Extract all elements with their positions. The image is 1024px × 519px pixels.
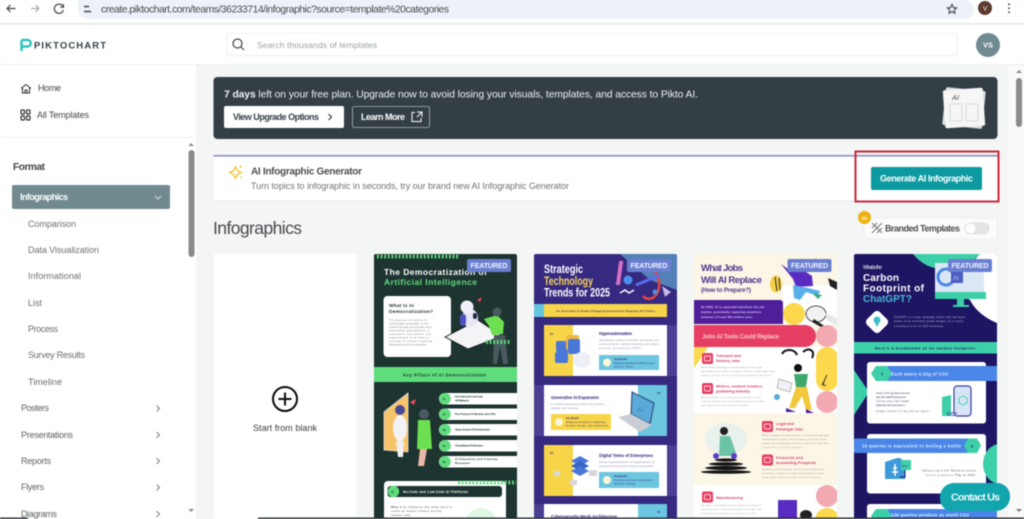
browser toolbar	[0, 0, 1024, 24]
job: writers: publishing industry	[716, 390, 751, 394]
trend 2: generative AI: 02	[657, 391, 661, 395]
job: finance: automation, number-crunching, bookkeeping and data	[762, 472, 825, 475]
fact 2: boiling: 2	[971, 444, 974, 448]
intro text: ChatGPT is a large language model that has been	[894, 316, 966, 319]
icon: browser menu	[1008, 4, 1010, 12]
featured badge: FEATURED	[952, 263, 988, 270]
job: manufacturing: repetitive tasks, factory work roles in changes and	[701, 508, 762, 511]
category items	[21, 403, 74, 519]
illustration: monitor with AI	[935, 263, 986, 307]
featured badge: FEATURED	[470, 263, 508, 270]
fact 2: boiling: 16 queries is equivalent to boiling a bottle	[862, 444, 962, 448]
decoration: teal half circle	[983, 444, 1017, 484]
trend 1: hyperautomation: Key Benefit:	[614, 358, 628, 361]
fact 1: per query: CO2 per query than Google	[876, 400, 910, 403]
decoration: flying person	[770, 258, 837, 300]
band: carbon breakdown	[854, 342, 997, 354]
sub-menu items: Survey Results	[28, 350, 86, 360]
featured badge	[467, 259, 511, 272]
pillars list: No-Code and Low-Code	[455, 394, 483, 398]
pillars list: AI Platforms	[455, 398, 469, 402]
job: legal: analysis, the drafting work could be at risk and the legal field	[762, 442, 829, 445]
intro box: organizations of all sizes to	[389, 336, 430, 340]
card: carbon footprint of ChatGPT	[854, 254, 1017, 519]
card title	[384, 267, 487, 287]
icon: star	[947, 4, 957, 13]
AI generator panel	[214, 152, 998, 202]
job: finance: Handling accounting jobs can be done by AI-based	[762, 468, 825, 471]
intro box	[384, 296, 451, 357]
job: transport: replaces drivers that in turn may face potential job losses.	[701, 374, 772, 377]
trend 1: hyperautomation: defined tasks.	[614, 366, 634, 368]
decoration: yellow corner	[694, 347, 708, 368]
fact 2: boiling: kettle produces 70g of CO2.	[926, 474, 976, 477]
job: legal: Models probably touch by checking or reviewing through legal	[762, 434, 830, 437]
sub-menu items: Comparison	[28, 219, 76, 229]
decoration: yellow pill	[816, 347, 838, 413]
button: generate AI infographic: Generate AI Infographic	[880, 174, 973, 184]
button: contact us	[940, 483, 1010, 511]
button: view upgrade options	[224, 106, 344, 128]
nav: home	[21, 83, 61, 93]
trend 1: hyperautomation: 01	[550, 332, 554, 336]
trend 1: hyperautomation: Hyperautomation	[599, 331, 632, 336]
job: legal: could face corporate changes.	[762, 446, 803, 449]
nav: all templates: All Templates	[37, 110, 90, 120]
pillars list: 03	[442, 428, 446, 432]
card title	[863, 265, 925, 305]
sidebar	[0, 65, 196, 519]
job: legal: Paralegal Jobs	[776, 428, 803, 432]
banner message: 7 days left on your free plan. Upgrade now to avoid losing your visuals, templates, and access to Pikto AI.	[224, 90, 698, 100]
active item: infographics	[12, 185, 170, 209]
url text: create.piktochart.com/teams/36233714/infographic?source=template%20categories	[101, 4, 449, 16]
trend 2: generative AI: product design, and automation.	[566, 424, 609, 428]
icon: magnifier	[233, 39, 244, 50]
job: transport: depending on the number of intelligent vehicles in wide-range usage	[701, 370, 776, 373]
trend 3: digital twins: 03	[550, 451, 554, 455]
job: writers: Writers, content creators,	[716, 384, 763, 388]
intro block	[694, 300, 783, 324]
category items: Presentations	[21, 430, 74, 440]
trend 4: cybersecurity: 04	[657, 510, 661, 514]
job: legal: Legal and	[776, 422, 795, 426]
highlight: red box	[856, 152, 998, 202]
icon: back arrow	[7, 5, 16, 12]
intro box: experts through user-friendly tools,	[389, 326, 432, 329]
app header	[0, 25, 1024, 65]
intro block: between 2.4 and 300 million jobs.	[701, 315, 753, 319]
button: learn more: Learn More	[361, 112, 405, 122]
profile badge	[978, 1, 992, 15]
trend 1: hyperautomation: Automating complex business processes end	[599, 339, 660, 342]
intro box: advanced technical expertise.	[389, 344, 427, 346]
decorative shapes	[617, 254, 677, 299]
fact 1: per query: Using a CO2 calculator and some	[876, 392, 911, 395]
icon: crown badge	[858, 211, 871, 224]
generator title: AI Infographic Generator	[251, 166, 362, 178]
section box: platforms: create AI models without writing	[391, 510, 442, 513]
trend 2: generative AI: Key Benefit:	[566, 417, 580, 420]
icon: forward arrow	[31, 5, 39, 12]
profile badge: V	[983, 6, 988, 12]
band: carbon breakdown: Here's a breakdown of its carbon footprint:	[875, 346, 976, 350]
illustration: person with laptop	[774, 350, 814, 413]
intro text: shown to be extremely power-hungry. As a result,	[894, 320, 964, 323]
fact 1: per query: 1	[881, 371, 884, 376]
featured badge	[948, 259, 992, 272]
job: finance	[762, 454, 825, 479]
trend 1: hyperautomation: Reduces operational effort by up to	[614, 362, 655, 365]
sub-menu items	[28, 219, 99, 387]
band: key pillars: Key Pillars of AI Democratization	[403, 372, 486, 378]
pillars list: 01	[442, 397, 446, 401]
card title: ChatGPT?	[863, 294, 912, 305]
card title: Artificial Intelligence	[384, 277, 477, 287]
decoration: robot head	[806, 306, 837, 331]
user avatar: VS	[983, 40, 993, 50]
featured badge: FEATURED	[791, 263, 828, 270]
card title: The Democratization of	[384, 267, 487, 277]
toggle switch	[965, 223, 989, 234]
featured badge: FEATURED	[630, 263, 668, 270]
branded label: Branded Templates	[885, 224, 960, 234]
illustration: data stack	[554, 456, 597, 485]
button: learn more	[352, 106, 430, 128]
decorative shapes	[913, 254, 997, 323]
address bar	[78, 0, 974, 19]
illustration: laptop: AI	[637, 407, 644, 414]
search placeholder: Search thousands of templates	[257, 40, 377, 50]
heading: format: Format	[13, 162, 46, 173]
pillars list: Pre-Trained AI Models and APIs	[455, 412, 496, 416]
icon: location diamond	[864, 309, 890, 335]
card title: What Jobs	[701, 263, 743, 274]
trend 3: digital twins: simulate and optimize business processes.	[599, 465, 654, 468]
section box: platforms: What It Is: Platforms that allow users to	[391, 506, 453, 509]
window bottom edge	[0, 518, 1024, 519]
sub-menu items: List	[28, 298, 42, 308]
pillars list: 04	[442, 444, 446, 448]
intro box: leverage AI without requiring	[389, 340, 433, 343]
section box: platforms: No-Code and Low-Code AI Platforms	[403, 490, 468, 494]
trend 4: cybersecurity: Cybersecurity Mesh Architecture	[551, 514, 618, 519]
category items: Diagrams	[21, 509, 58, 519]
icon: plus	[273, 387, 297, 411]
category items: Posters	[21, 403, 50, 413]
illustration: kettle: Co2	[902, 464, 908, 468]
icon: reload	[54, 4, 63, 13]
trend 2: generative AI: Generative AI Expansion	[551, 395, 599, 400]
trend 1: hyperautomation	[544, 325, 667, 376]
trend 2: generative AI	[544, 385, 667, 436]
banner: jobs list: Jobs AI Tools Could Replace	[702, 334, 780, 340]
trend 2: generative AI: AI models generating human-like content,	[551, 403, 605, 406]
section heading: infographics: Infographics	[213, 218, 302, 238]
top stripes	[377, 254, 459, 258]
pillars list: 02	[442, 412, 446, 416]
section box: platforms	[384, 481, 516, 519]
pillars list	[439, 393, 529, 468]
illustration: robot and woman	[384, 393, 432, 466]
fact 2: boiling: Taking a cup of boil' Boiling an electric	[922, 470, 977, 472]
card: start from blank	[214, 254, 356, 519]
sub-menu items: Data Visualization	[28, 245, 99, 255]
job: transport: Autonomous technology is already helping in these jobs,	[701, 366, 763, 369]
side stripes	[534, 325, 677, 519]
trend 3: digital twins: Key Benefit:	[614, 475, 628, 478]
card title: Footprint of	[863, 284, 925, 294]
featured badge	[627, 259, 671, 272]
icon: site settings	[84, 6, 91, 12]
job: transport	[701, 353, 776, 377]
job: manufacturing: As robotics and digital factory systems in charge of	[701, 504, 761, 507]
fact 2: boiling	[854, 434, 986, 494]
sidebar scrollbar	[188, 143, 194, 512]
card title: What is the	[863, 265, 882, 271]
logo: PIKTOCHART	[34, 40, 106, 52]
illustration: phone with CO2: CO²	[947, 411, 957, 418]
job: transport: Delivery Jobs	[716, 359, 740, 363]
pillars list: AI Education and Training	[455, 457, 497, 461]
user avatar	[976, 33, 1000, 57]
card title: Will AI Replace	[701, 275, 762, 286]
illustration: figure on podium	[701, 423, 751, 474]
nav: home: Home	[38, 83, 61, 93]
intro box: empowers individuals and	[389, 333, 432, 336]
illustration: robot with tablet	[445, 297, 510, 364]
featured badge	[788, 259, 832, 272]
job: transport: Transport and	[716, 354, 742, 358]
button: view upgrade options: View Upgrade Options	[233, 112, 319, 122]
illustration: servers	[555, 335, 580, 363]
main page scrollbar	[1008, 65, 1024, 519]
pillars list: 05	[442, 460, 446, 464]
intro block: market, potentially replacing anywhere	[701, 310, 761, 314]
job: legal	[762, 421, 830, 449]
icon: tools	[872, 223, 882, 233]
section box: platforms: complex code.	[391, 514, 411, 517]
job: manufacturing: machines working more and long hours now.	[701, 512, 756, 515]
sub-menu items: Informational	[28, 271, 81, 281]
job: legal: representations produce more changes in the sector where	[762, 438, 828, 441]
blank label: Start from blank	[253, 423, 318, 433]
card: democratization of AI	[374, 254, 529, 519]
fact 1: per query	[867, 362, 997, 424]
trend 2: generative AI: designs, and solutions.	[551, 407, 579, 410]
job: finance: Accounting Prospects	[776, 461, 816, 465]
icon: sparkles	[230, 165, 242, 178]
pillars list: Cloud-Based AI Services	[455, 444, 483, 448]
section box: platforms: 01	[391, 490, 395, 494]
trend 3: digital twins: Digital Twins of Enterprises	[599, 453, 654, 458]
intro box: The process of making AI	[389, 319, 427, 322]
band: key pillars	[374, 367, 517, 382]
button: contact us: Contact Us	[951, 492, 1000, 504]
generator subtitle: Turn topics to infographic in seconds, try our brand new AI Infographic Generator	[251, 181, 569, 191]
active item: infographics: Infographics	[20, 192, 68, 202]
pillars list: Resources	[455, 461, 470, 465]
job: finance: entry, while, can be accurate, and run every day.	[762, 476, 821, 479]
job: writers: tools and articles, and creating first drafts.	[701, 404, 749, 407]
intro box: Democratization?	[389, 309, 433, 315]
banner: jobs list	[694, 325, 838, 347]
trend 2: generative AI: Enhances creativity in marketing,	[566, 421, 606, 424]
pillars list: Open-Source AI Frameworks	[455, 428, 490, 432]
decoration: bottom shapes	[778, 485, 839, 519]
intro text	[894, 316, 966, 328]
intro text: it produces a lot of CO2 emissions.	[894, 325, 944, 328]
trend 4: cybersecurity	[544, 504, 667, 519]
job: writers: workflow helping them with keyword research, briefing	[701, 400, 765, 403]
intro box: What Is AI	[389, 303, 415, 309]
trend 3: digital twins: Virtual representations of organizations to	[599, 461, 655, 464]
trend 3: digital twins: Improves decision-making and	[614, 479, 653, 482]
category items: Reports	[21, 456, 52, 466]
upgrade banner	[214, 77, 998, 139]
icon: AI document stack: AI	[951, 93, 959, 102]
card title	[701, 263, 762, 294]
job: manufacturing: Manufacturing	[716, 496, 744, 500]
job: writers	[701, 383, 765, 407]
subtitle band	[534, 304, 667, 317]
fact 1: per query: (apparently, each search query in	[876, 404, 906, 407]
sub-menu items: Process	[28, 324, 58, 334]
decoration: teal triangle	[854, 370, 869, 415]
fact 3: comparison	[867, 504, 997, 519]
card: strategic technology trends	[534, 254, 677, 519]
intro box: frameworks, and platforms. It	[389, 330, 429, 332]
intro box: technologies accessible to non-	[389, 322, 429, 326]
illustration: monitor with AI: AI	[953, 276, 959, 282]
trend 3: digital twins: business strategy.	[614, 482, 636, 486]
icon: AI document stack	[942, 87, 986, 129]
trend 1: hyperautomation: to end using AI, machine learning, and robotic	[599, 343, 660, 346]
subtitle band: An Overview of Game-Changing Innovations Shaping the Future	[556, 309, 655, 313]
job: finance: Financial and	[776, 456, 804, 460]
card: what jobs will AI replace	[694, 254, 839, 519]
card title: Trends for 2025	[544, 288, 610, 300]
job: manufacturing	[701, 492, 762, 515]
search box	[227, 34, 957, 56]
category items: Flyers	[21, 482, 44, 492]
fact 1: per query: basic math, ChatGPT produces more	[876, 396, 907, 399]
fact 1: per query: Each query 4.32g of CO2	[891, 372, 949, 376]
fact 3: comparison: 139 queries produce as much CO2	[891, 512, 970, 518]
job: writers: Many industries use content generation AI to create	[701, 396, 762, 399]
fact 1: per query: Google results in 0.2g CO2 per query.)	[876, 410, 930, 413]
card title: (How to Prepare?)	[701, 288, 751, 294]
trend 1: hyperautomation: process automation (RPA).	[599, 347, 642, 350]
sub-menu items: Timeline	[28, 377, 62, 387]
button: generate AI infographic	[871, 167, 982, 190]
card title: Strategic	[544, 264, 583, 276]
card title: Carbon	[863, 273, 899, 284]
intro block: By 2030, AI is expected transform the job	[701, 305, 764, 309]
category chevrons	[156, 406, 160, 517]
decoration: yellow circle	[783, 303, 805, 325]
branded templates toggle	[858, 211, 997, 239]
card title: Technology	[544, 276, 593, 288]
trend 3: digital twins	[544, 445, 667, 496]
card title	[544, 264, 610, 300]
